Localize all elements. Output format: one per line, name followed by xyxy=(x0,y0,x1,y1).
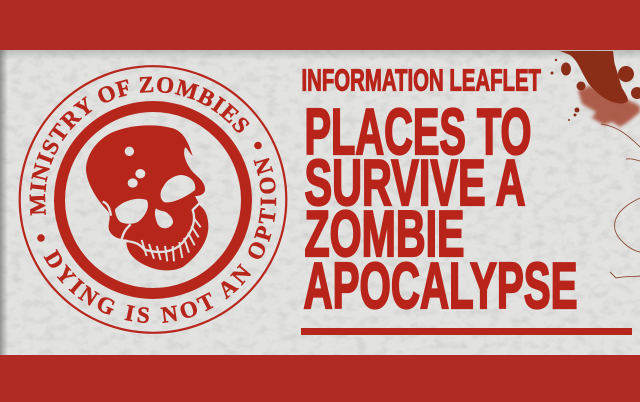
splatter droplets xyxy=(550,59,640,121)
blood splatter xyxy=(550,51,640,278)
seal text: ministry of zombies: MINISTRY OF ZOMBIES xyxy=(30,76,250,216)
red rule xyxy=(301,328,632,335)
blood veins xyxy=(601,124,640,278)
top red band xyxy=(0,0,640,50)
paper background xyxy=(0,50,640,355)
splatter faded stain xyxy=(578,86,640,127)
splatter dark core xyxy=(560,51,628,104)
seal dot left xyxy=(37,234,45,242)
icon: skull xyxy=(86,125,208,270)
bottom red band xyxy=(0,355,640,402)
seal dot right xyxy=(254,142,262,149)
outer ring xyxy=(20,66,286,333)
skull crack and teeth gap xyxy=(103,201,202,252)
inner ring xyxy=(60,106,246,294)
title line 3: ZOMBIE xyxy=(304,197,464,270)
ministry of zombies seal xyxy=(18,65,288,334)
seal text: dying is not an option: DYING IS NOT AN OPTION xyxy=(43,158,276,324)
skull teeth xyxy=(142,218,201,261)
main title xyxy=(304,95,578,322)
